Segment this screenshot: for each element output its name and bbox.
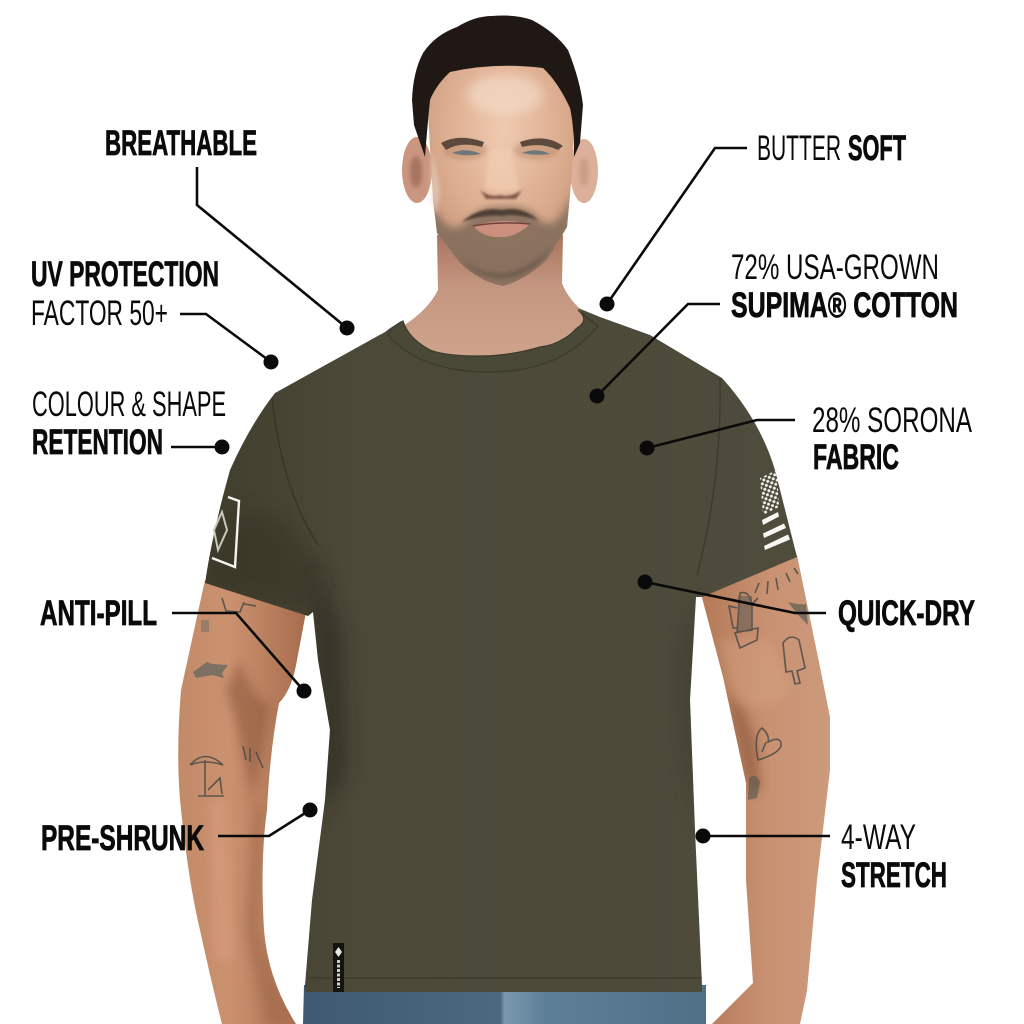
label: ANTI-PILL: [40, 594, 157, 633]
leader line: [645, 582, 826, 613]
leader line: [197, 167, 347, 328]
dot: [296, 684, 312, 698]
label second line: FABRIC: [813, 438, 899, 477]
leader line: [218, 810, 310, 836]
cactus: [729, 593, 758, 648]
callout: sorona fabric: [640, 401, 972, 477]
callout: anti-pill: [40, 594, 312, 698]
tattoos on right arm: [729, 568, 808, 800]
right sleeve flag: [760, 470, 790, 550]
face: [427, 58, 573, 286]
callout: breathable: [105, 124, 354, 336]
label heading: UV PROTECTION: [31, 255, 219, 294]
hem label: [333, 943, 344, 992]
left arm: [178, 580, 306, 1024]
dot: [590, 388, 604, 404]
label first line: COLOUR & SHAPE: [32, 385, 226, 424]
callout: butter soft: [600, 129, 906, 312]
dot: [638, 574, 652, 590]
facial features: [430, 75, 563, 237]
right arm: [700, 555, 830, 1024]
shirt shading: [205, 378, 720, 978]
hair: [412, 16, 583, 157]
ears: [402, 137, 598, 203]
tattoos on left arm: [190, 598, 263, 796]
dot: [340, 320, 354, 336]
dot: [600, 296, 614, 312]
dot: [302, 802, 318, 818]
t-shirt body and sleeves: [205, 308, 797, 992]
leader line: [597, 304, 720, 396]
dot: [640, 440, 654, 456]
neck: [403, 235, 590, 362]
label regular: BUTTER: [757, 129, 841, 168]
leader line: [171, 446, 222, 448]
leader line: [172, 613, 304, 691]
beard: [434, 194, 570, 286]
leader line: [647, 420, 795, 448]
label bold: SOFT: [848, 129, 906, 168]
callout: colour and shape retention: [32, 385, 230, 462]
leader line: [607, 148, 747, 304]
leader line: [180, 314, 271, 362]
callout: uv protection: [31, 255, 278, 370]
label first line: 72% USA-GROWN: [731, 248, 939, 287]
flag dots: [760, 470, 779, 515]
man wearing olive t-shirt: [178, 16, 830, 1024]
label sub-line: FACTOR 50+: [31, 294, 168, 333]
callout: quick-dry: [638, 574, 975, 633]
label: PRE-SHRUNK: [41, 819, 204, 858]
dot: [214, 440, 230, 454]
left sleeve patch: [212, 497, 239, 567]
callout: supima cotton: [590, 248, 958, 404]
collar: [388, 310, 598, 372]
label first line: 4-WAY: [841, 818, 916, 857]
callout: pre-shrunk: [41, 802, 318, 858]
leader line: [703, 835, 830, 837]
jeans: [303, 985, 706, 1024]
callout: 4-way stretch: [696, 818, 947, 895]
label second line: STRETCH: [841, 856, 947, 895]
dot: [696, 828, 710, 844]
label second line: RETENTION: [32, 423, 163, 462]
dot: [264, 354, 278, 370]
label: BREATHABLE: [105, 124, 257, 163]
